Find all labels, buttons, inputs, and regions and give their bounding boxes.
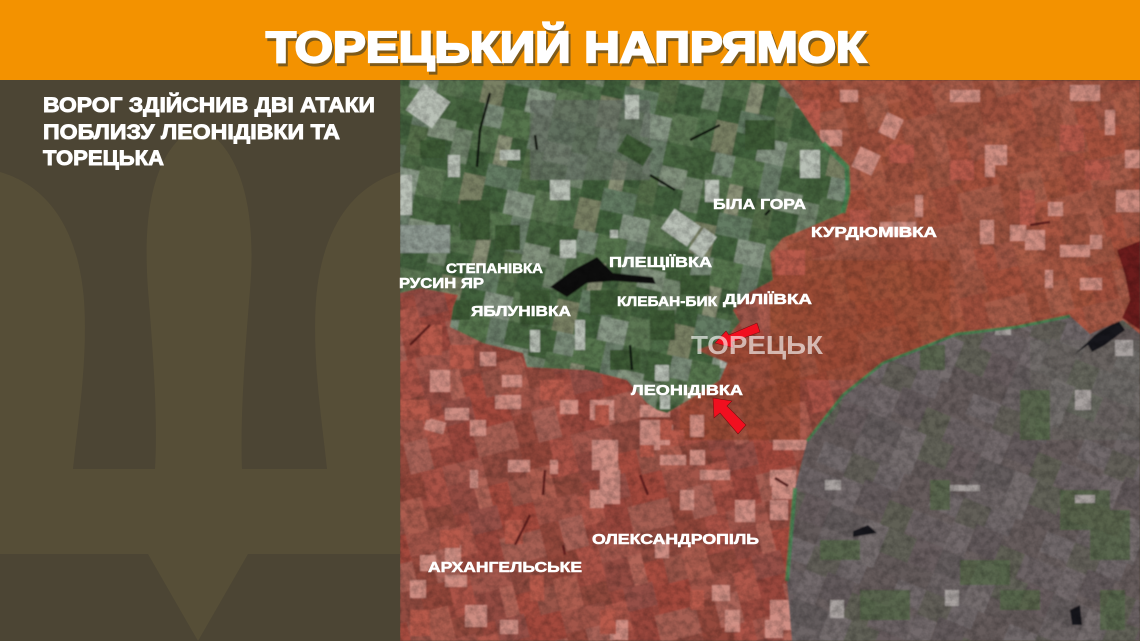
label: Oleksandropil: ОЛЕКСАНДРОПІЛЬ [592, 531, 759, 548]
label: Arkhanhelske: АРХАНГЕЛЬСЬКЕ [428, 559, 582, 576]
label: Kleban-Byk: КЛЕБАН-БИК [617, 293, 717, 309]
icon: trident watermark [0, 125, 400, 641]
summary text: ВОРОГ ЗДІЙСНИВ ДВІ АТАКИ [43, 93, 375, 117]
water bodies [853, 320, 1125, 625]
map [400, 80, 1140, 641]
summary text [43, 93, 375, 170]
front-line strips [787, 143, 1070, 581]
label: Pleshchiivka: ПЛЕЩІЇВКА [609, 254, 712, 271]
label: Bila Hora: БІЛА ГОРА [713, 196, 806, 213]
russian-held zone [400, 80, 1140, 641]
label: Kurdiumivka: КУРДЮМІВКА [811, 224, 937, 241]
label: Dyliivka: ДИЛІЇВКА [723, 291, 812, 308]
left panel [0, 80, 400, 641]
Ukrainian-controlled zone [400, 80, 860, 420]
label: Toretsk: ТОРЕЦЬК [691, 330, 823, 360]
summary text: ТОРЕЦЬКА [43, 147, 164, 170]
label: Rusyn Yar: РУСИН ЯР [399, 275, 484, 292]
lake: occupied reservoir [1117, 241, 1140, 330]
summary text: ПОБЛИЗУ ЛЕОНІДІВКИ ТА [43, 121, 340, 144]
title: ТОРЕЦЬКИЙ НАПРЯМОК [266, 21, 866, 72]
label: Leonidivka: ЛЕОНІДІВКА [631, 382, 743, 399]
map labels [399, 196, 937, 576]
arrow: attack on Toretsk [715, 323, 760, 348]
lake and streams [477, 93, 770, 370]
arrow: attack on Leonidivka [713, 398, 746, 434]
header bar [0, 0, 1140, 80]
label: Stepanivka: СТЕПАНІВКА [446, 260, 543, 276]
label: Yablunivka: ЯБЛУНІВКА [471, 303, 571, 320]
satellite texture [400, 80, 1140, 641]
occupied-territory grey zone [780, 310, 1140, 641]
title: ТОРЕЦЬКИЙ НАПРЯМОК [268, 24, 868, 75]
ravines [410, 222, 1050, 555]
